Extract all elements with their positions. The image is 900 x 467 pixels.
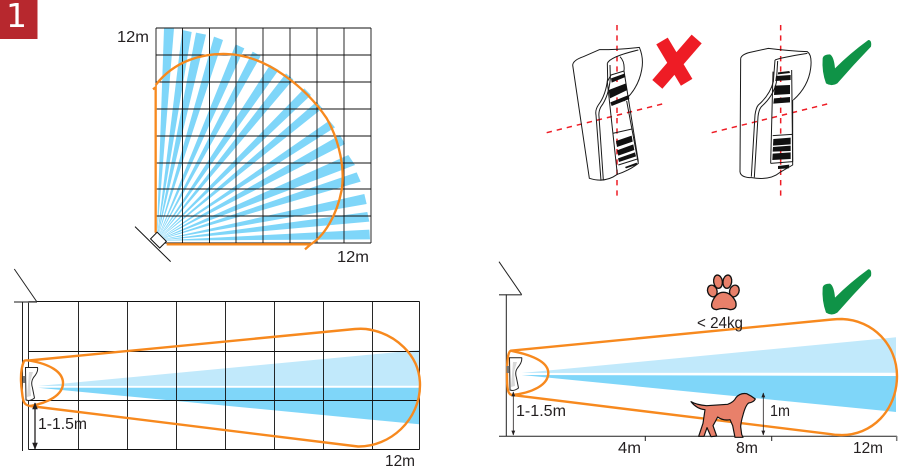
wall, ceiling and floor <box>499 262 897 441</box>
panel: pet immunity side view <box>499 262 897 457</box>
guide lines: red dashed axes, upright <box>712 25 830 198</box>
label: 4m distance: 4m <box>618 440 641 457</box>
label: 1m height: 1m <box>770 403 790 420</box>
badge: step number 1 <box>0 0 38 39</box>
panel: correct mounting, upright sensor <box>712 25 871 198</box>
panel: side view coverage with grid <box>14 269 420 467</box>
chart: fan of detection beams <box>157 28 370 241</box>
outline: side view orange boundary <box>21 329 420 447</box>
icon: paw print <box>706 274 741 310</box>
icon: sensor on wall, top view <box>135 227 171 262</box>
icon: dog <box>691 393 755 437</box>
icon: green check <box>822 40 871 85</box>
icon: mini sensor <box>23 368 38 400</box>
outline: orange coverage boundary <box>153 54 343 249</box>
chart: side view beam wedges <box>38 350 419 424</box>
label: 12m horizontal axis: 12m <box>337 249 369 266</box>
panel: incorrect mounting, tilted sensor <box>547 25 697 198</box>
icon: mini sensor on wall <box>506 358 522 390</box>
icon: upright sensor <box>740 48 811 178</box>
icon: red cross <box>657 39 697 84</box>
icon: tilted sensor <box>573 47 642 181</box>
label: 1-1.5m height, pet view: 1-1.5m <box>516 403 566 420</box>
label: under 24kg: < 24kg <box>697 315 743 332</box>
label: 12m vertical axis: 12m <box>117 29 149 46</box>
outline: pet view orange boundary <box>507 319 897 435</box>
label: 1-1.5m height: 1-1.5m <box>38 416 87 433</box>
arrow: dog height 1m <box>762 393 764 435</box>
label: 12m distance: 12m <box>853 440 883 457</box>
panel: top view coverage chart <box>117 28 371 266</box>
chart: pet view beam wedges <box>522 337 896 412</box>
arrow: mounting height, pet view <box>512 392 514 435</box>
wall and ceiling <box>14 269 37 451</box>
icon: green check, pet allowed <box>822 269 871 314</box>
arrow: mounting height <box>34 403 36 449</box>
icon: black lens stripes <box>609 74 637 168</box>
icon: black lens stripes, upright <box>772 71 791 169</box>
label: 8m distance: 8m <box>736 440 758 457</box>
guide lines: red dashed axes <box>547 25 665 198</box>
